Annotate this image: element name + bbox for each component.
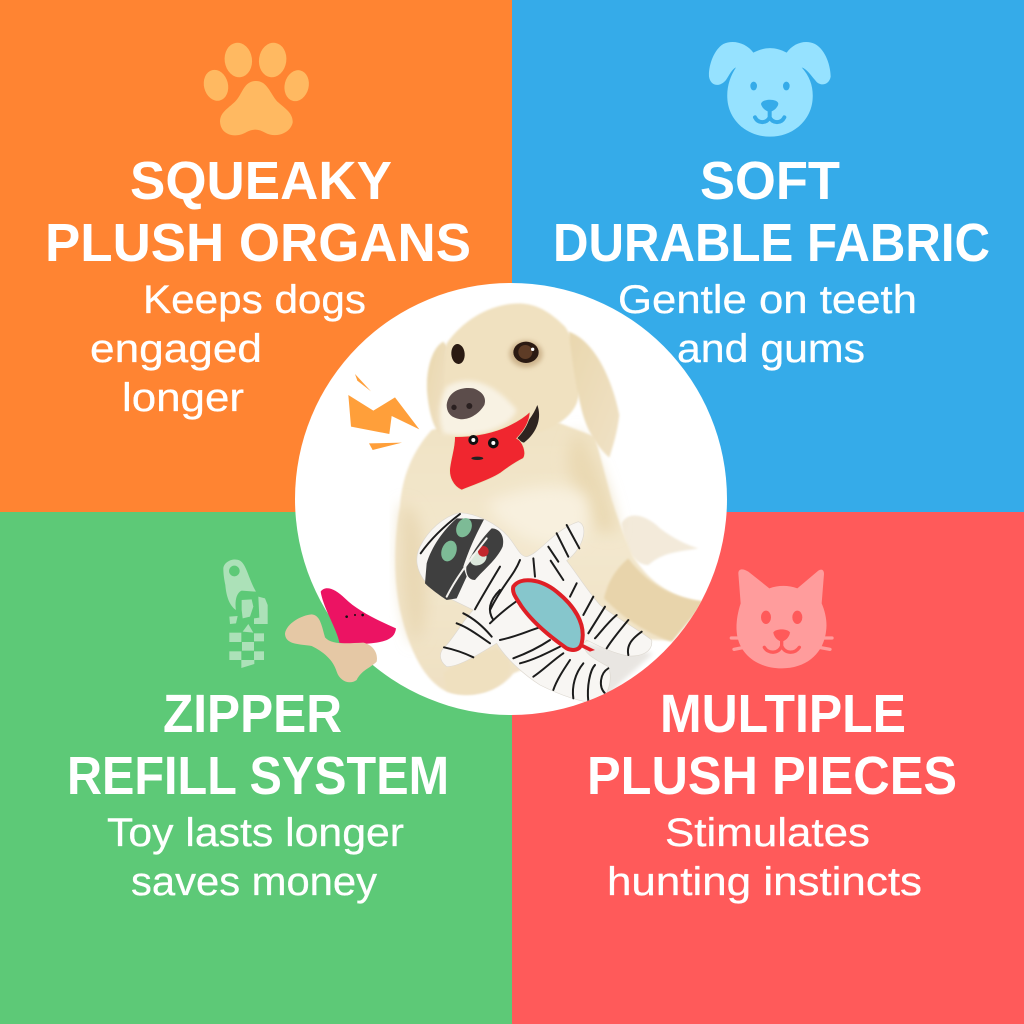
panel: multiple plush pieces: [512, 512, 1024, 1024]
text block: squeaky plush organs description: [90, 278, 366, 420]
panel: squeaky plush organs: [0, 0, 512, 512]
text block: squeaky plush organs description: Keeps dogs: [143, 278, 366, 322]
text block: soft durable fabric heading: SOFT: [700, 151, 840, 211]
center photo circle: [295, 283, 727, 715]
dog tail: [622, 515, 698, 565]
dog left flank shade: [400, 503, 427, 643]
dog neck shade: [567, 430, 617, 533]
dog right eye: [513, 342, 539, 363]
mummy belly zipper pocket: [513, 580, 583, 650]
text block: zipper refill system description: [107, 811, 404, 904]
text block: squeaky plush organs description: longer: [122, 376, 244, 420]
text block: multiple plush pieces description: Stimulates: [665, 811, 870, 855]
dog nose: [447, 388, 485, 419]
dog paws: [450, 690, 488, 696]
text block: squeaky plush organs description: engaged: [90, 327, 262, 371]
text block: zipper refill system description: saves money: [131, 860, 377, 904]
mummy dark face wrap: [425, 518, 484, 600]
text block: multiple plush pieces heading: MULTIPLE: [660, 684, 906, 744]
text block: soft durable fabric description: [618, 278, 917, 371]
zipper tab: [582, 644, 595, 652]
icon: zipper: [223, 560, 268, 668]
tan bone toy: [285, 614, 377, 682]
pink plush piece: [321, 588, 396, 644]
squeak lightning bolt: [348, 374, 419, 450]
text block: zipper refill system heading: ZIPPER: [163, 684, 342, 744]
panel: zipper refill system: [0, 512, 512, 1024]
dog head: [442, 302, 579, 426]
text block: soft durable fabric description: and gums: [677, 327, 865, 371]
illustration: golden retriever: [348, 303, 705, 705]
text block: squeaky plush organs heading: SQUEAKY: [130, 151, 392, 211]
mummy silhouette: [417, 513, 652, 703]
dog hind leg shade: [604, 558, 705, 642]
dog body: [395, 407, 703, 695]
text block: zipper refill system description: Toy lasts longer: [107, 811, 404, 855]
organ face: [468, 435, 478, 445]
dog mouth: [515, 405, 539, 443]
icon: paw print: [201, 41, 312, 135]
text block: soft durable fabric heading: DURABLE FABRIC: [553, 213, 990, 273]
dog left ear: [427, 342, 447, 435]
mummy bandage stripes: [421, 514, 642, 702]
dog chest highlight: [487, 486, 589, 547]
dog right ear: [569, 332, 619, 458]
dog muzzle: [440, 381, 517, 435]
text block: zipper refill system heading: REFILL SYSTEM: [67, 746, 449, 806]
panel: soft durable fabric: [512, 0, 1024, 512]
mummy plush toy: [417, 513, 653, 705]
icon: cat face: [731, 569, 832, 668]
text block: soft durable fabric description: Gentle on teeth: [618, 278, 917, 322]
text block: zipper refill system heading: [67, 684, 449, 806]
text block: multiple plush pieces description: hunting instincts: [607, 860, 922, 904]
text block: multiple plush pieces heading: [587, 684, 957, 806]
text block: squeaky plush organs heading: [45, 151, 471, 273]
red plush organ: [450, 412, 530, 490]
icon: dog face: [709, 42, 831, 137]
text block: multiple plush pieces heading: PLUSH PIECES: [587, 746, 957, 806]
text block: squeaky plush organs heading: PLUSH ORGANS: [45, 213, 471, 273]
text block: multiple plush pieces description: [607, 811, 922, 904]
mummy shadow: [584, 643, 652, 700]
text block: soft durable fabric heading: [553, 151, 990, 273]
mummy eyes: [456, 518, 472, 538]
dog eye shadow: [509, 341, 543, 367]
dog left eye: [451, 344, 465, 364]
